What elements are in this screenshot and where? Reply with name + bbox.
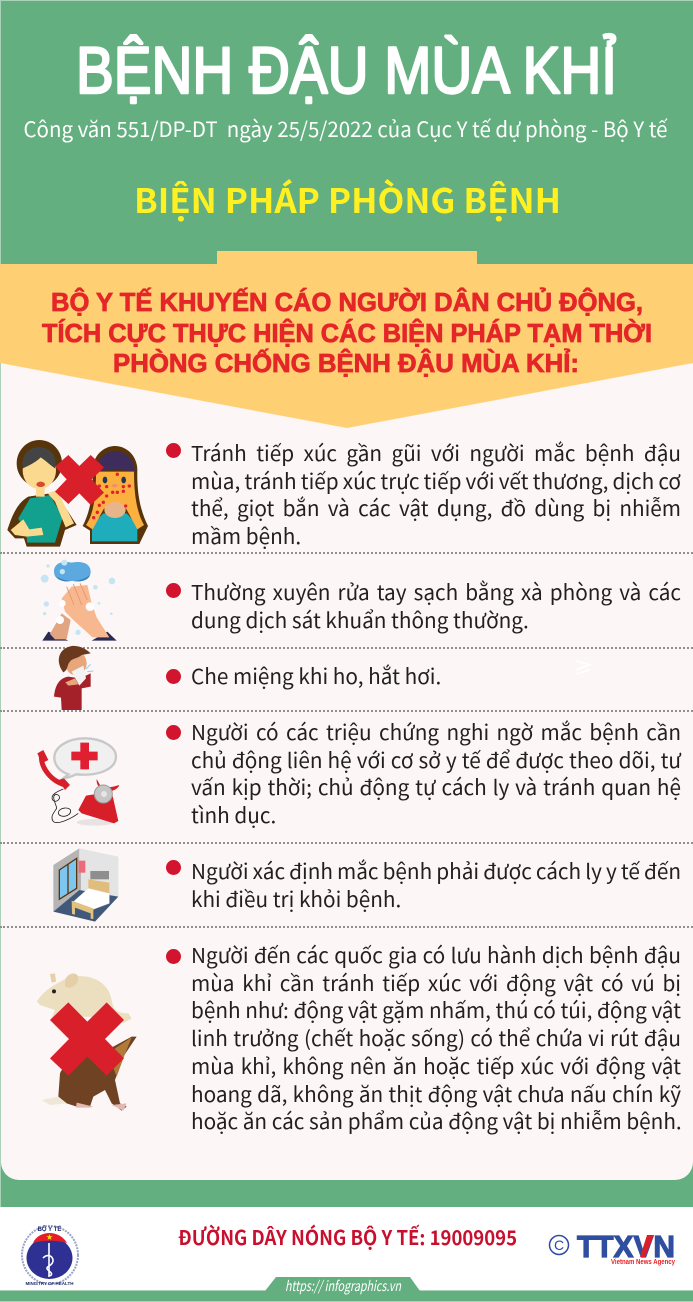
footer: hotline: ĐƯỜNG DÂY NÓNG BỘ Y TẾ: 19009095 bbox=[178, 1222, 517, 1251]
item 6 bullet bbox=[166, 948, 180, 964]
banner: yellow arrow with recommendation: TÍCH CỰC THỰC HIỆN CÁC BIỆN PHÁP TẠM THỜI bbox=[42, 318, 652, 348]
item 5 text bbox=[191, 855, 681, 913]
item 6 text: mùa khỉ, không nên ăn hoặc tiếp xúc với động vật bbox=[191, 1050, 681, 1080]
item 1 text: mùa, tránh tiếp xúc trực tiếp với vết thương, dịch cơ bbox=[191, 465, 681, 495]
item 2 text: Thường xuyên rửa tay sạch bằng xà phòng và các bbox=[191, 576, 681, 606]
small white mark bbox=[576, 661, 590, 674]
footer: website tab: https:// infographics.vn bbox=[285, 1276, 402, 1296]
item 6 text: mùa khỉ cần tránh tiếp xúc với động vật có vú bị bbox=[191, 967, 681, 997]
item 1 text bbox=[191, 437, 681, 550]
item 4 text: Người có các triệu chứng nghi ngờ mắc bệnh cần bbox=[191, 716, 681, 746]
item 1 text: mầm bệnh. bbox=[191, 520, 301, 550]
item 2 text bbox=[191, 576, 681, 634]
item 5 text: khi điều trị khỏi bệnh. bbox=[191, 883, 401, 913]
item 4 text: vấn kịp thời; chủ động tự cách ly và tránh quan hệ bbox=[191, 771, 681, 801]
item 2 text: dung dịch sát khuẩn thông thường. bbox=[191, 604, 529, 634]
item 6 text: Người đến các quốc gia có lưu hành dịch bệnh đậu bbox=[191, 939, 681, 969]
item 5 bullet bbox=[166, 860, 180, 875]
item 6 text bbox=[191, 939, 682, 1135]
item 5 text: Người xác định mắc bệnh phải được cách ly y tế đến bbox=[191, 855, 681, 885]
banner: yellow arrow with recommendation bbox=[0, 251, 693, 428]
title: BỆNH ĐẬU MÙA KHỈ bbox=[76, 33, 617, 107]
footer: TTXVN logo: Vietnam News Agency bbox=[611, 1259, 675, 1266]
subtitle: Công văn 551/DP-DT ngày 25/5/2022 của Cục Y tế dự phòng - Bộ Y tế bbox=[24, 114, 668, 144]
item 6 text: hoặc ăn các sản phẩm của động vật bị nhiễm bệnh. bbox=[191, 1105, 682, 1135]
item 4 text bbox=[191, 716, 682, 829]
footer: Ministry of Health logo: MINISTRY OF HEALTH bbox=[26, 1281, 73, 1286]
item 3 bullet bbox=[166, 668, 180, 684]
item 4 text: chủ động liên hệ với cơ sở y tế để được theo dõi, tư bbox=[191, 744, 681, 774]
item 6 text: hoang dã, không ăn thịt động vật chưa nấu chín kỹ bbox=[191, 1078, 681, 1108]
banner: yellow arrow with recommendation: PHÒNG CHỐNG BỆNH ĐẬU MÙA KHỈ: bbox=[113, 348, 579, 378]
item 4 text: tình dục. bbox=[191, 799, 276, 829]
footer: Ministry of Health logo: BỘ Y TẾ bbox=[38, 1225, 61, 1233]
icon: isolation hospital room bbox=[53, 848, 118, 922]
icon: two sick children with red cross bbox=[7, 440, 148, 547]
item 3 text: Che miệng khi ho, hắt hơi. bbox=[191, 660, 441, 690]
heading: measures: BIỆN PHÁP PHÒNG BỆNH bbox=[134, 174, 561, 223]
item 1 text: thể, giọt bắn và các vật dụng, đồ dùng bị nhiễm bbox=[191, 492, 681, 522]
banner: yellow arrow with recommendation: BỘ Y TẾ KHUYẾN CÁO NGƯỜI DÂN CHỦ ĐỘNG, bbox=[51, 286, 643, 317]
icon: red telephone with medical speech bubble bbox=[37, 738, 119, 826]
item 6 text: bệnh như: động vật gặm nhấm, thú có túi, động vật bbox=[191, 994, 681, 1024]
item 4 bullet bbox=[166, 725, 180, 740]
item 2 bullet bbox=[166, 582, 180, 598]
footer: TTXVN logo: C bbox=[554, 1237, 564, 1253]
icon: rodents with red cross bbox=[37, 973, 137, 1111]
footer: TTXVN logo: TTXVN bbox=[577, 1229, 675, 1264]
icon: washing hands with soap bbox=[41, 560, 117, 641]
icon: man sneezing into tissue bbox=[54, 646, 93, 710]
item 1 text: Tránh tiếp xúc gần gũi với người mắc bệnh đậu bbox=[191, 437, 681, 467]
item 1 bullet bbox=[166, 442, 180, 458]
item 6 text: linh trưởng (chết hoặc sống) có thể chứa vi rút đậu bbox=[191, 1022, 681, 1052]
